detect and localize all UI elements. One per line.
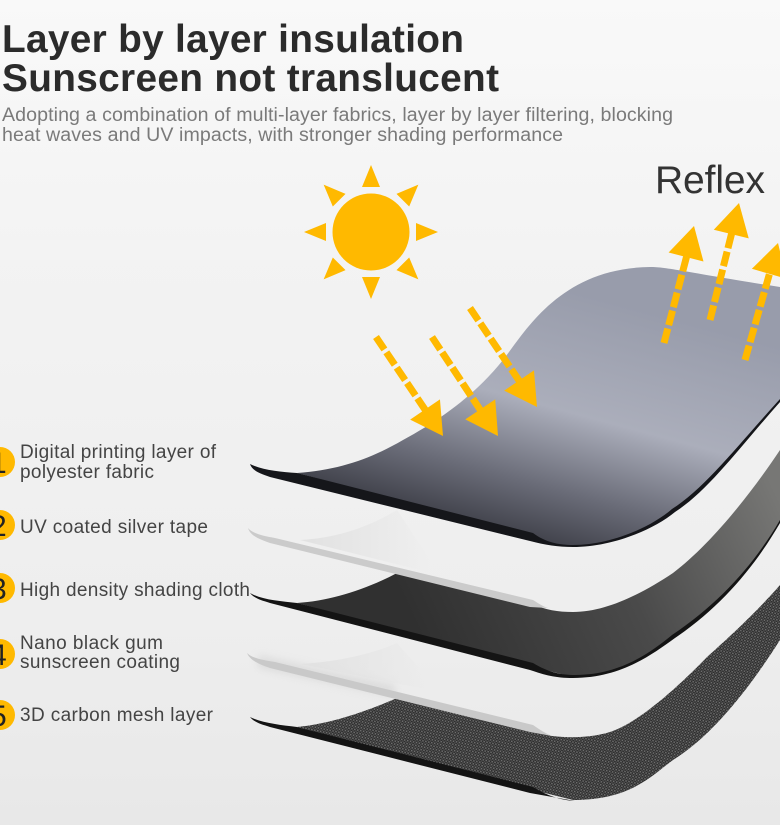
label 4: Nano black gum [20,633,163,654]
layer 2: silver tape [248,510,548,608]
layer 3: high density shading cloth [250,450,780,678]
label 4: sunscreen coating [20,652,180,673]
layer 4: nano black gum coating [247,643,552,736]
label 3 [0,573,250,606]
label 4 [0,633,180,673]
label 3: High density shading cloth [20,580,250,601]
title [2,18,499,100]
icon: sun [304,165,438,299]
arrow: reflected 2 [710,199,756,320]
arrow: incoming 2 [432,337,513,446]
subtitle: Adopting a combination of multi-layer fabrics, layer by layer filtering, blocking [2,104,673,126]
arrows: incoming sunlight [376,308,552,446]
subtitle [2,104,673,146]
arrow: reflected 3 [745,238,780,360]
heading: Reflex: Reflex [655,159,766,202]
layer 1: polyester fabric [250,267,780,547]
shadow under layer 4 [258,655,395,697]
label 1: polyester fabric [20,462,154,483]
label 2: UV coated silver tape [20,517,208,538]
label 5 [0,700,214,733]
arrow: reflected 1 [664,222,711,343]
arrow: incoming 3 [470,308,552,417]
label 2 [0,510,208,543]
title: Sunscreen not translucent [2,57,499,100]
label 1 [0,442,217,483]
label list [0,442,250,733]
label 5: 3D carbon mesh layer [20,705,214,726]
title: Layer by layer insulation [2,18,464,61]
label 1: Digital printing layer of [20,442,217,463]
arrow: incoming 1 [376,337,458,446]
arrows: reflected light [664,199,780,360]
layer 5: 3D carbon mesh [250,585,780,801]
subtitle: heat waves and UV impacts, with stronger shading performance [2,124,563,146]
